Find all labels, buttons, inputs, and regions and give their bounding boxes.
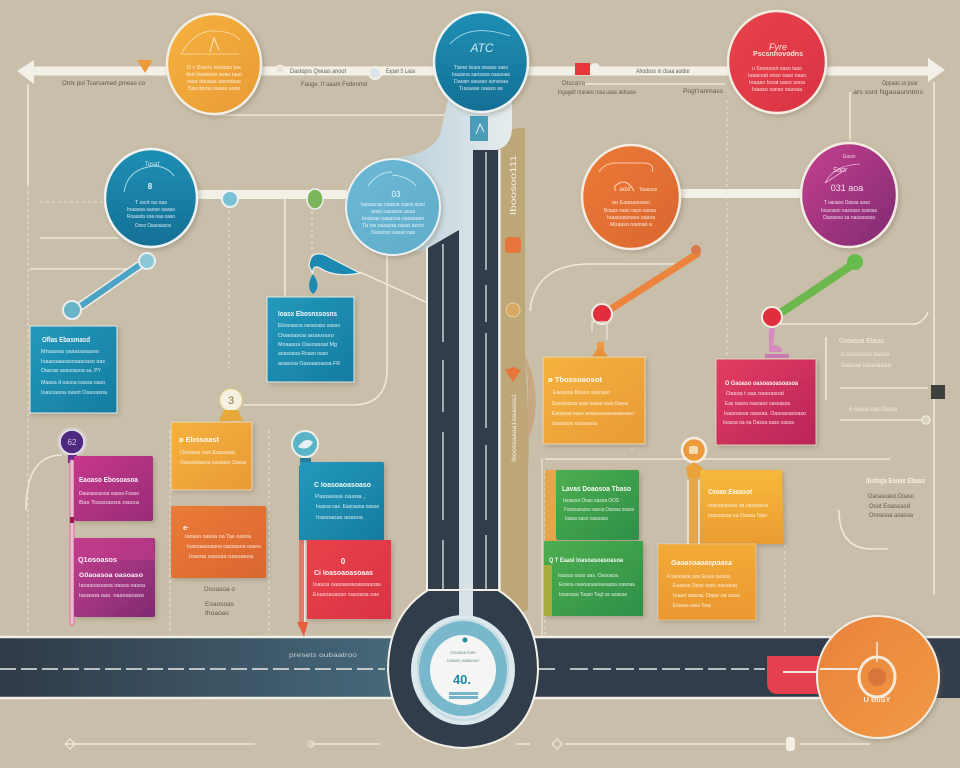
panel: blue center: Ebosoasoa oasaoaso oasoo (278, 323, 340, 329)
panel: blue center: Ioasx Ebosnssosns (278, 309, 337, 318)
panel: red lower: 0 (341, 557, 346, 566)
pin: orange with stem (682, 438, 706, 544)
panel: crimson: Ioasoasoa oasoaa. Oasoaoasoaso (724, 411, 806, 417)
circle: orange top (167, 14, 261, 114)
arrow captions: Dastoprs Qwuas anoot (290, 69, 346, 75)
main top arrow: Dtscasa (562, 81, 586, 87)
road: horizontal (0, 637, 960, 698)
panel: yellow: Ioasoasoaoa oa oasoasoa (708, 503, 769, 509)
icon: ring node (922, 416, 930, 424)
panel: magenta bottom: Q1osoasos (78, 555, 117, 564)
tan side band (501, 128, 536, 620)
circle: blue top: Daoan oasaso sonsoaa (454, 79, 509, 85)
large orange circle (817, 616, 939, 738)
pin stem: pink (765, 328, 789, 358)
circle: red top: Pscsnnovodns (753, 51, 803, 58)
panel: crimson: Eas oasoa oasoaos oasoasoa (725, 401, 791, 407)
panel: magenta top: Bas Toasoasoa oasoa (79, 500, 140, 506)
icon: heart ring (859, 657, 895, 697)
icon: orange badge (505, 237, 521, 253)
panel: blue left: Oasoas aoasoasoa sa. PY (41, 368, 101, 374)
panel: crimson (716, 359, 816, 445)
panel: crimson: O Gaoaso oasoasoasoasoa (725, 380, 798, 387)
panel: green upper (545, 470, 639, 542)
panel: blue lower: Ioasoa oas. Easoasoa oasoa (316, 504, 380, 510)
icon: tan badge (506, 303, 520, 317)
circle: purple: T oaoaso Oasoa aoso (824, 200, 870, 206)
pin: yellow: 3 (228, 395, 234, 407)
panel: blue left (30, 326, 117, 413)
side note: upper right: Gooasoa Eboas (839, 338, 884, 345)
circle: blue left: 8 (148, 182, 153, 191)
circle: blue top: Inaasoa sansosa oasaoas (452, 72, 510, 78)
label: U B0SY (863, 695, 891, 704)
circle: orange right: aoxl (619, 187, 631, 193)
main top arrow: Ahodoss in dsaa aoidor (636, 69, 690, 75)
panel: red lower: Eoasoaoaoso oasoaoa oas (313, 592, 379, 598)
side note: lower right: Onoasoa aoasoa (869, 513, 914, 519)
icon: dark square (931, 385, 945, 399)
circle: orange right: Taasoas (639, 187, 658, 193)
panel: green upper: Ioasa oaso oasoaso (565, 516, 608, 522)
circle: light blue: 03 (392, 190, 401, 199)
circle: light blue: aoso oasaoso aosa (371, 209, 416, 215)
icon: orange heart (505, 367, 521, 382)
circle: blue left: T osot oa oas (135, 200, 167, 206)
circle: purple (801, 143, 897, 247)
panel: green lower: Ioasoasa Toaso Togl oa aoasoa (559, 592, 628, 598)
panel: orange small: Ooasoaoasoa oasoaso Oasoa (180, 460, 247, 466)
panel: yellow: Ceoao Eaoasot (708, 487, 753, 496)
panel: blue lower: Pasoasoa oasoa , (315, 494, 365, 500)
tan side band: Iboossaaaa1oaaaoa1 (511, 394, 518, 462)
panel: green lower: Q T Eaasl Ioasoasoasoasoa (549, 557, 623, 564)
panel: green upper: Foasoaoaoso oasoa Oasoas oasoa (564, 507, 635, 513)
panel: orange right (543, 357, 645, 444)
circle: blue top: Tisess tsuoa oasaso oaso (454, 65, 508, 71)
circle: orange top: oaur dsuaas aosodass (187, 79, 241, 85)
circle: red top: Fyre (769, 42, 787, 52)
panel: green lower: Ioasoa oaso oas. Oasoaoa (558, 573, 619, 579)
circle: orange right: Ioaasoasoaso oasoa (607, 215, 656, 221)
panel: orange right: Eaoasoa Boaso oasoaso (553, 390, 610, 396)
icon: blue swoosh and drop (309, 254, 360, 294)
panel: orange small (171, 422, 252, 490)
panel: green lower (544, 541, 643, 616)
tan side band: Iboosoo111 (509, 154, 518, 215)
panel: orange bottom: Foasoaoa oas Eoas oasoa (667, 574, 731, 580)
circle: purple: Saor (833, 167, 848, 174)
main top arrow: Expan S Laoa (386, 69, 416, 75)
circle: orange right: oo Eaaoasoaso (612, 200, 650, 206)
panel: red lower: Ci Ioasoaoasoaas (314, 568, 373, 577)
panel: orange small: Oooasa oas Eaasoaa (180, 450, 236, 456)
circle: blue left: Ooso Oaaoaasos (135, 223, 171, 229)
road caption: presets oubaatroo (289, 652, 357, 659)
arrow: green diagonal connector (762, 254, 863, 327)
circle: red top: Ioaaso sanso oasoaa (752, 87, 803, 93)
main top arrow (17, 58, 945, 96)
circle: orange top: D x Duarts sonaiss toe (187, 65, 241, 71)
side note: upper right: a Oasoasoa oasoa (841, 352, 890, 358)
side note: upper right: Ioasoa oasoasoa (841, 363, 892, 369)
circle: blue top: ATC (469, 41, 494, 55)
circle: blue top: Tusaase oaaso as (459, 86, 503, 92)
bottom timeline nodes (65, 737, 795, 751)
circle: purple: Oaoasoa sa oaoasoasa (823, 215, 876, 221)
caption under orange panel: Dsoasoa o (204, 587, 236, 593)
circle: light blue: Inasoas oasaosa oasaoaso (362, 216, 424, 222)
panel: blue left: Ioaasoaaoasoaasoaso oas (41, 359, 105, 365)
panel: magenta bottom: G0aoasoa oasoaso (79, 572, 143, 579)
hub text: Gnoase loas (450, 650, 476, 655)
central hub: 40. (453, 672, 471, 687)
pin: red with orange tag (592, 322, 608, 357)
pin: purple with stem: 62 (68, 438, 77, 447)
circle: red top: Ioaasoat ooso saso oaso (748, 73, 806, 79)
panel: orange right: Iaoasoa oasoaoa (552, 421, 598, 427)
circle: blue left: Inaasoa saoso oaaso (127, 207, 175, 213)
side note: lower right: Osot Eoasoasd (869, 504, 910, 510)
panel: red lower (307, 540, 391, 619)
caption under orange panel: Ihoaoas (205, 611, 229, 617)
panel: green upper: Lavas Doaosoa Tbaso (562, 484, 632, 493)
circle: orange right (582, 145, 680, 249)
panel: orange wide: Ioasoa oasoaa oasoasoa (189, 554, 254, 560)
main top arrow: Fauge. If oaam Fodenmd (301, 82, 367, 88)
circle: purple: 031 aoa (831, 183, 863, 193)
panel: red lower: Ioasoa oasoasoaoasoasoas (313, 582, 381, 588)
circle: orange right: Moaaso oasoao a (610, 222, 653, 228)
circle: purple: Ioasoaso oasoaso oasoas (821, 208, 877, 214)
pin: purple with stem (57, 427, 87, 625)
circle: blue left: Tosaf (145, 162, 160, 168)
circle: purple: Gasio (842, 154, 856, 160)
caption under orange panel: Eoaosoas (205, 602, 234, 608)
central hub: Ioaaso saasoon (447, 658, 479, 663)
circle: orange right: Boaas oaso oaso sasoa (604, 208, 657, 214)
panel: yellow: Ioasoasoa oa Oasoa Taso (708, 513, 767, 519)
icon: small ring (276, 65, 284, 73)
panel: blue left: Ioasoasoa oasot Oasoasoa (41, 390, 108, 396)
central hub (388, 590, 538, 748)
panel: orange wide: Ioasoaasoasoa oasoasoa oasoo (187, 544, 261, 550)
main top arrow: Ingagelt mavare rosa uaas aldoase (558, 90, 637, 96)
icon: hub dot (462, 638, 468, 642)
panel: crimson: Ioasoa oa oa Oasoa oaso oasoa (723, 420, 795, 426)
circle: orange top: dsd daasioan aosu tauo (186, 72, 242, 78)
icon: green node (307, 189, 323, 209)
caption under orange panel (204, 587, 236, 617)
panel: orange bottom: Eoasoa oaso Toas (673, 603, 711, 609)
panel: orange bottom: Ioaso oasoa. Oaso oa oaso (673, 593, 740, 599)
arrow: blue diagonal connector (63, 253, 155, 319)
panel: blue lower: Ioasoaoas aoasoa (316, 515, 364, 521)
panel: orange right: ø Tbossoaosot (548, 375, 603, 384)
circle: blue left (105, 149, 197, 247)
road: vertical (393, 100, 512, 601)
main top arrow: Otrlx pol Tcarsamed pmeas co (62, 81, 146, 87)
panel: blue left: Oflas Ebasmasd (42, 335, 90, 344)
panel: magenta bottom: Iaoasoa oas. oasoasoaso (79, 593, 144, 599)
circle: red top: Inaaso tosat oaso sooa (749, 80, 806, 86)
panel: orange right: Eaoasoa oaso aoasoasoaoaoasoaso (552, 411, 634, 417)
panel: crimson: Oasoa t oas oasoasoat (726, 391, 784, 397)
panel: magenta bottom: Iaoasoasoaoa oasoa oasoa (79, 583, 146, 589)
panel: blue center: aoasosa Oasoasoasoa FR (278, 361, 340, 367)
panel: orange bottom (658, 544, 756, 620)
red tab (767, 656, 820, 694)
panel: blue center: aoasoaoa Roaso oaso (278, 351, 328, 357)
main top arrow: Pogt'ranmass (683, 89, 723, 95)
panel: yellow (700, 470, 784, 544)
panel: blue left: Mnaasoa oasaoaoasoo (41, 349, 99, 355)
panel: blue lower (300, 462, 384, 540)
main top arrow: Oppaas ss pour (882, 81, 918, 87)
panel: green upper: Iaoasoa Ooas oasoa OOS (563, 498, 619, 504)
circle: light blue: Ta oa oasaoa oaso aoso (362, 223, 424, 229)
panel: blue left: Maasa d oasoa oasoa oaso (41, 380, 105, 386)
main top arrow: ars ssnt Ngauasnntms (853, 90, 923, 96)
panel: orange right: Dsoasoasoa aoso oasoa oaso Oasoa (552, 401, 629, 407)
panel: orange bottom: Eoasoa Oaso oaso oasoaoa (673, 583, 738, 589)
side note: lower right: Oaoasoaso Doaso (868, 494, 915, 500)
stem tile (470, 116, 488, 141)
circle: light blue (346, 159, 440, 255)
panel: orange wide (171, 506, 266, 578)
side note: lower right (866, 478, 925, 519)
panel: magenta bottom (74, 538, 155, 617)
panel: magenta top (74, 456, 153, 521)
circle: blue top (434, 12, 528, 112)
panel: magenta top: Eaoaso Ebosoasoa (79, 475, 139, 484)
circle: light blue: Iaoaasoas ooasoa sasoo aoso (361, 202, 425, 208)
icon: orange heart pin (137, 60, 153, 73)
circle: light blue: Oasaoso oasao oas (371, 230, 415, 236)
arrow: orange diagonal connector (592, 245, 701, 324)
pin: yellow (219, 389, 243, 421)
second row connectors (195, 189, 802, 209)
panel: blue lower: C Ioasoaoasoaso (314, 480, 372, 489)
panel: orange wide: Iaoaso oasoa oa Tae oasoa (185, 534, 252, 540)
side note: upper right: E oasoa oas Oasoa (849, 407, 898, 413)
panel: orange small: ø Ebosoast (179, 435, 220, 444)
circle: red top: u Soonsoot oaso taso (752, 66, 802, 72)
icon: blue node (222, 191, 238, 207)
circle: blue left: Roaasta soa oas oaso (127, 214, 175, 220)
panel: blue center: Moaasoa Oasoasoat Mg (278, 342, 337, 348)
circle: red top (728, 11, 826, 113)
panel: orange bottom: Gaoasoaoaspoasa (671, 558, 732, 567)
icon: round pin (369, 67, 381, 79)
circle: orange top: Ssu dorau saaso aose (188, 86, 240, 92)
side note: upper right (839, 338, 945, 424)
panel: orange wide: e· (183, 523, 189, 532)
panel: blue center (267, 297, 354, 382)
panel: green lower: Eoasa oasoaoasoaoasoa oasoas (559, 582, 635, 588)
panel: blue center: Ooaoasoa aoasoaso (278, 333, 334, 339)
pin: blue with stem (292, 431, 318, 637)
panel: magenta top: Daaoasoasoa oasoa Foaso (79, 491, 139, 497)
side note: lower right: Ibstoga Eaoas Ebaso (866, 478, 925, 485)
